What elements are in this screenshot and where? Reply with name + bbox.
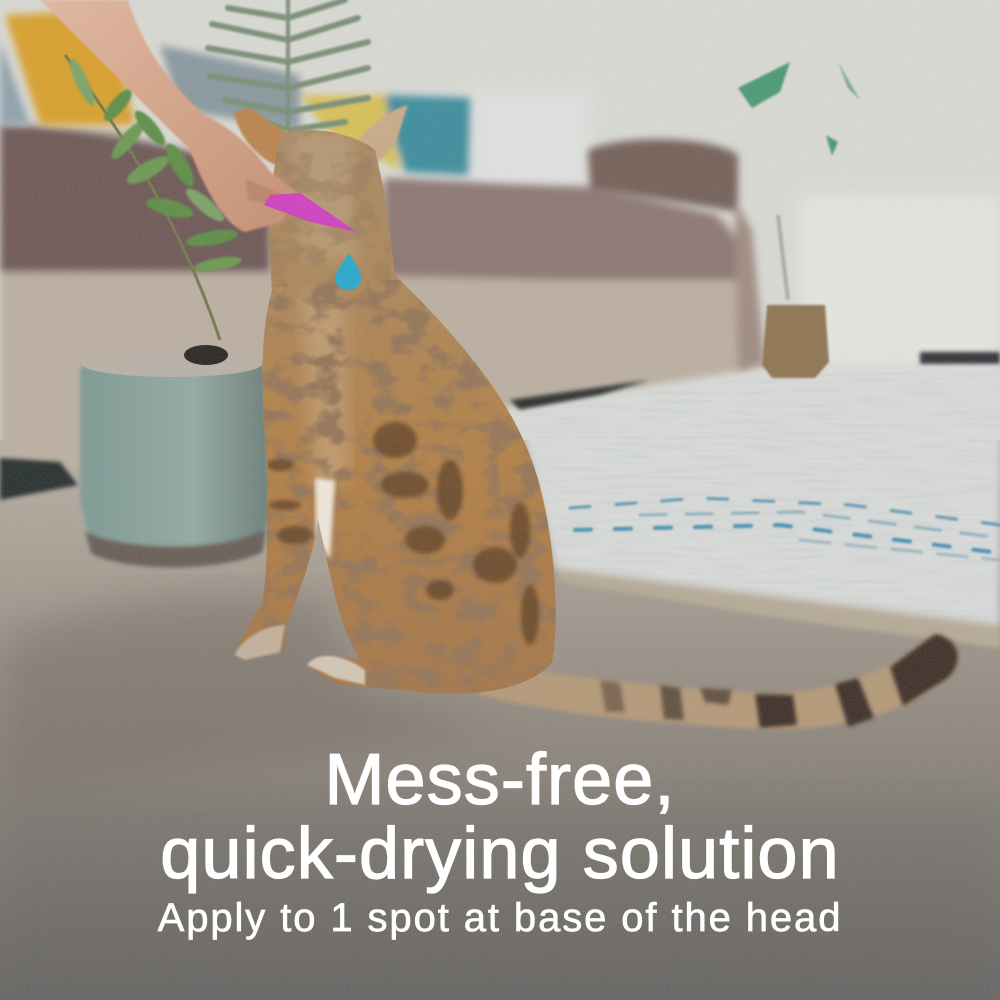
floor shadow	[0, 595, 500, 800]
water drop icon	[335, 253, 361, 290]
cat	[220, 105, 958, 729]
title: Mess-free,	[324, 740, 676, 820]
cat paws	[235, 625, 285, 660]
fern plant at back	[208, 0, 368, 130]
chest highlight	[315, 478, 335, 560]
applicator	[264, 193, 357, 232]
cat body	[238, 130, 556, 694]
potted plant	[65, 55, 270, 567]
plant pot	[80, 354, 270, 567]
cat tail	[480, 634, 958, 729]
hand	[40, 0, 297, 232]
cat ears	[234, 108, 290, 165]
bottom darkening	[0, 800, 1000, 1000]
sofa	[0, 125, 765, 470]
subtitle: Apply to 1 spot at base of the head	[158, 896, 842, 940]
title: quick-drying solution	[160, 814, 840, 894]
cushions	[0, 10, 470, 175]
basket and far plant	[738, 62, 860, 378]
title	[160, 740, 840, 894]
dark shadow strips	[0, 352, 1000, 500]
cat spots	[266, 422, 539, 645]
rug	[500, 360, 1000, 648]
floor	[0, 440, 1000, 1000]
